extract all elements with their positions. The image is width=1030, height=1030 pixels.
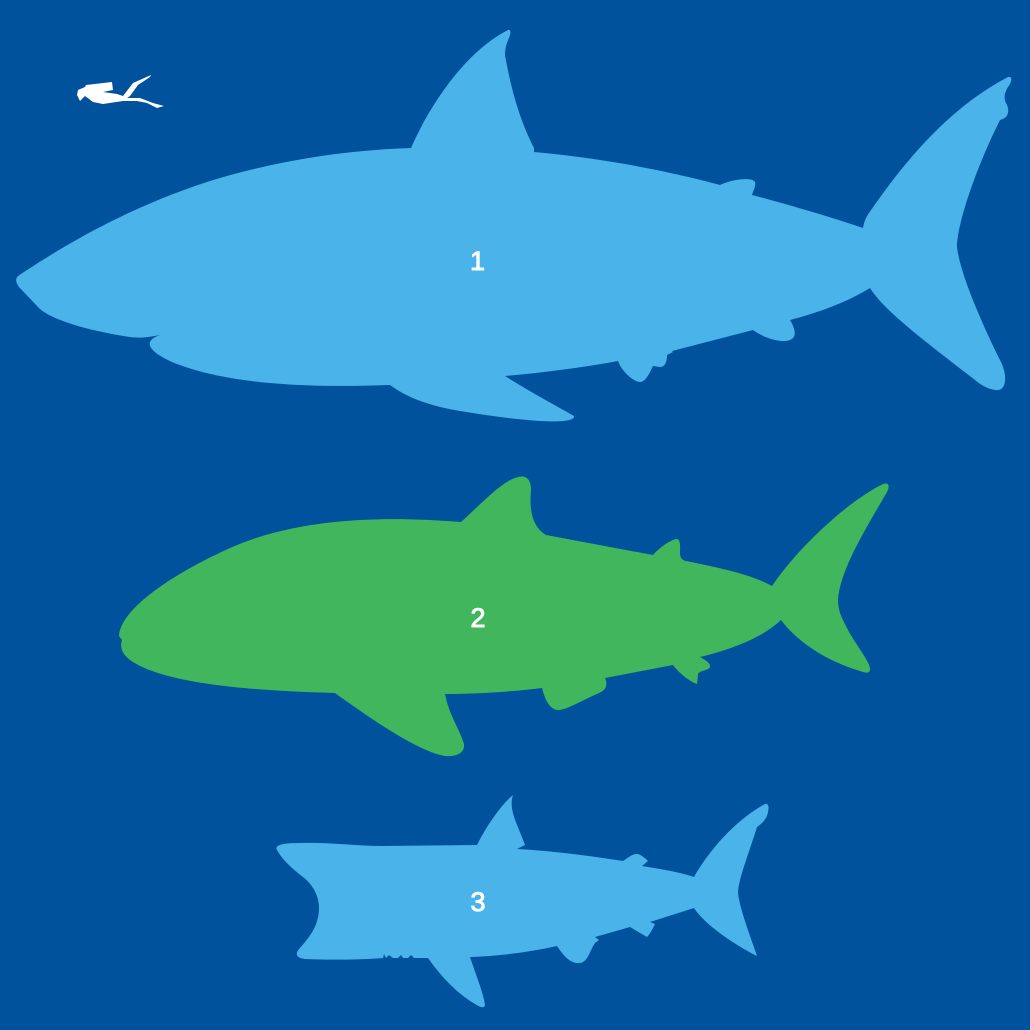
label: 1: 1 (470, 246, 485, 276)
shark 2: green silhouette (119, 476, 889, 756)
label: 2: 2 (470, 603, 486, 633)
shark 3: basking shark silhouette with open mouth (276, 795, 769, 1007)
shark 1: largest silhouette (16, 30, 1011, 421)
label: 3: 3 (470, 887, 486, 917)
icon: diver for scale (77, 75, 164, 108)
